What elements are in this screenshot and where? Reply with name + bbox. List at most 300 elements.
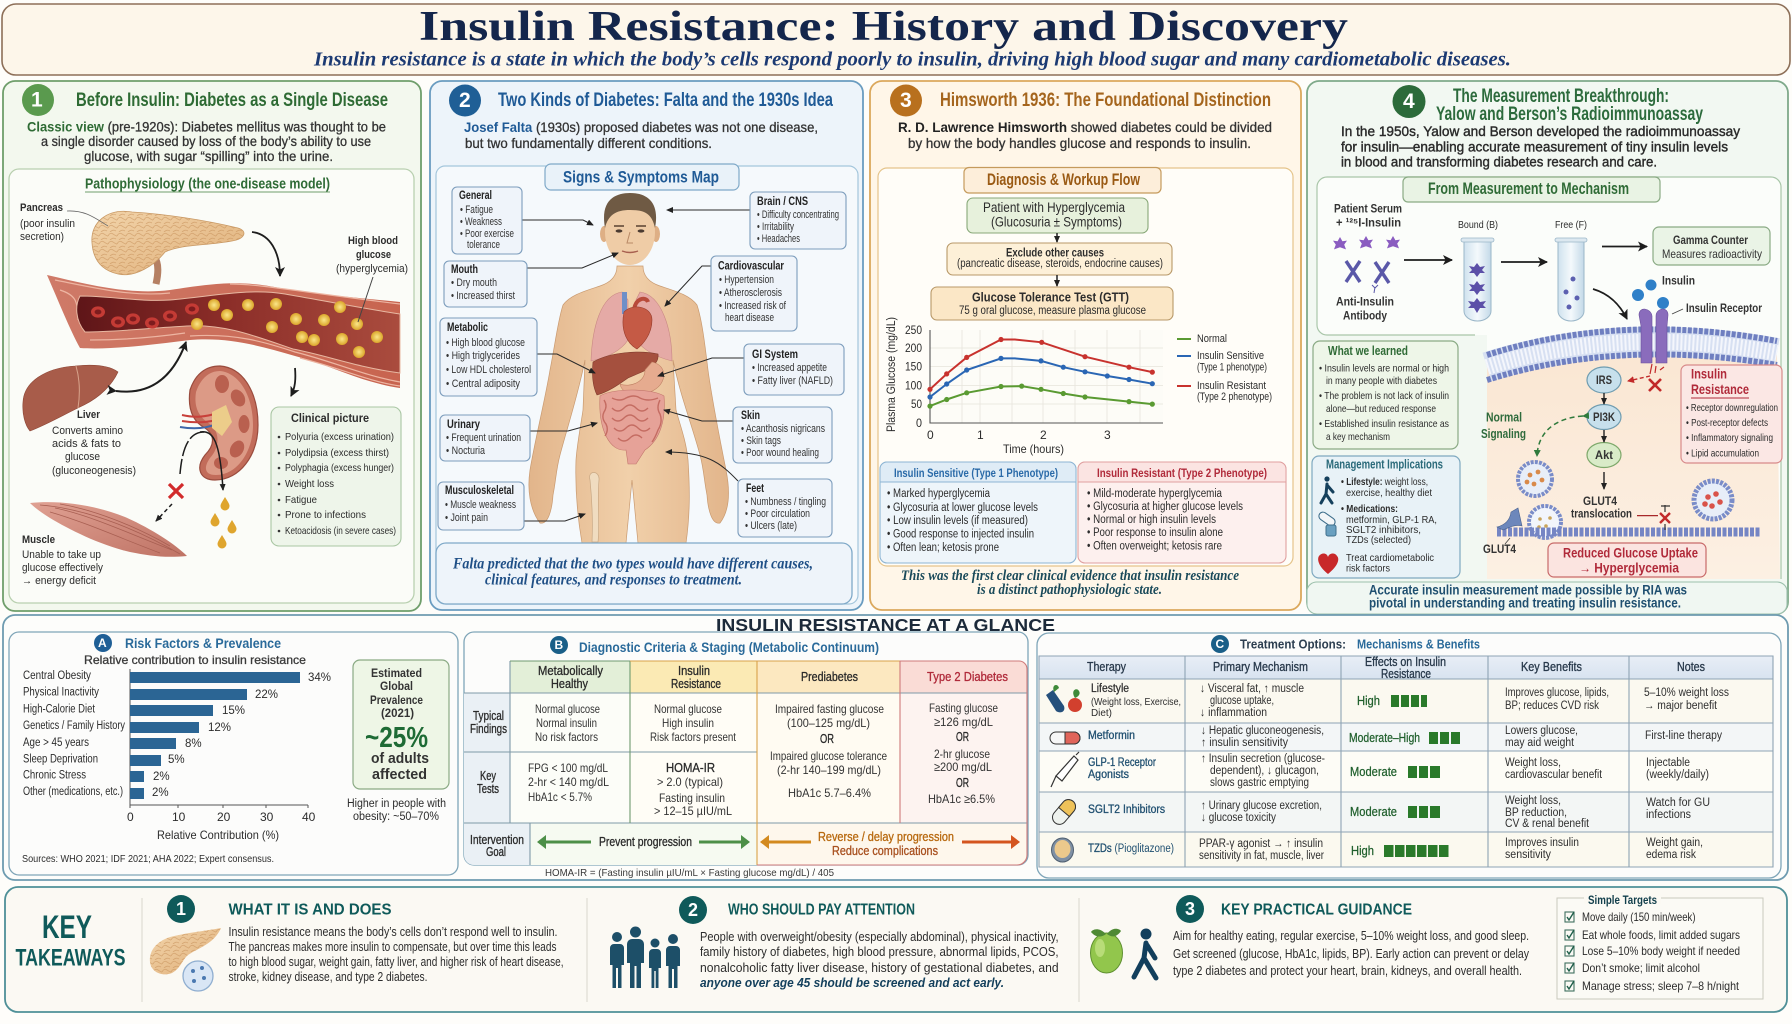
column: insulin resistance: Fasting insulin	[659, 791, 725, 805]
x axis labels	[927, 428, 1111, 456]
takeaway 3 text	[1173, 929, 1530, 978]
orange goal arrow	[760, 830, 1020, 858]
row labels	[470, 709, 524, 859]
chart legend: Insulin Sensitive	[1197, 350, 1264, 362]
insulin sensitive box	[880, 462, 1076, 563]
x axis labels: 2	[1040, 428, 1047, 442]
table fills	[1039, 656, 1773, 867]
flow: gtt box: 75 g oral glucose, measure plasma glucose	[959, 305, 1146, 317]
takeaway 2	[610, 896, 1059, 990]
liver	[23, 365, 118, 431]
cell interior	[1487, 342, 1780, 579]
column: type 2 diabetes: Fasting glucose	[929, 701, 998, 715]
antibody label	[1336, 295, 1394, 323]
heart	[622, 292, 652, 349]
badge b	[550, 636, 568, 654]
takeaway 2 heading: WHO SHOULD PAY ATTENTION	[728, 902, 915, 918]
row labels: Key	[480, 769, 497, 783]
column: type 2 diabetes: ≥200 mg/dL	[934, 760, 992, 774]
ria conclusion band	[1307, 582, 1787, 614]
yalow and berson text	[1341, 123, 1740, 170]
panel 3 heading: Himsworth 1936: The Foundational Distinction	[940, 89, 1271, 111]
box: metabolic: • High blood glucose	[446, 337, 525, 349]
falta text: but two fundamentally different conditions.	[465, 135, 712, 151]
row: lifestyle: ↓ inflammation	[1200, 707, 1267, 719]
green goal arrow: Prevent progression	[599, 835, 692, 849]
y axis labels: 50	[911, 397, 922, 411]
badge 3	[890, 84, 922, 116]
badge takeaway 2	[679, 896, 707, 924]
panel b heading: Diagnostic Criteria & Staging (Metabolic Continuum)	[579, 639, 879, 655]
icon: walking person	[1321, 476, 1333, 503]
insulin resistant box: • Often overweight; ketosis rare	[1087, 540, 1222, 552]
falta prediction callout	[436, 543, 852, 604]
box: cardiovascular: • Increased risk of	[719, 300, 787, 312]
arrow to gamma counter	[1602, 246, 1647, 248]
row: sglt2: ↑ Urinary glucose excretion,	[1201, 800, 1322, 812]
flow arrow 2	[1056, 275, 1058, 286]
management implications box: metformin, GLP-1 RA,	[1346, 514, 1437, 526]
column headers: Metabolically	[538, 664, 604, 678]
pancreas label: (poor insulin	[20, 218, 75, 230]
row: metformin: ↑ insulin sensitivity	[1201, 737, 1288, 749]
icon: pancreas and cell	[150, 928, 221, 991]
ria conclusion band: Accurate insulin measurement made possible by RIA was	[1369, 582, 1687, 598]
arrow to free tube	[1501, 261, 1547, 263]
row: sglt2	[1050, 795, 1710, 830]
box: cardiovascular: • Atherosclerosis	[719, 287, 782, 299]
insulin resistant box: Insulin Resistant (Type 2 Phenotype)	[1097, 466, 1267, 480]
clinical picture box: Polyphagia (excess hunger)	[285, 462, 394, 474]
badge 3: 3	[900, 89, 912, 112]
row: lifestyle: 5–10% weight loss	[1644, 687, 1729, 699]
row: lifestyle: → major benefit	[1644, 700, 1718, 712]
panel 4: measurement breakthrough	[1307, 81, 1788, 614]
bar categories: Physical Inactivity	[23, 687, 99, 699]
row: tzds: Improves insulin	[1505, 837, 1579, 849]
row: metformin	[1050, 725, 1722, 749]
clinical picture box	[271, 407, 401, 546]
antibodies	[1346, 261, 1389, 293]
what we learned box	[1313, 341, 1458, 449]
y axis labels: 200	[905, 341, 922, 355]
bar values: 8%	[185, 738, 202, 750]
insulin receptor label: Insulin Receptor	[1686, 301, 1762, 315]
panel c heading: Mechanisms & Benefits	[1357, 636, 1480, 652]
green goal arrow	[537, 835, 750, 849]
patient serum label: + ¹²⁵I-Insulin	[1336, 216, 1401, 230]
column headers: Type 2 Diabetes	[927, 670, 1008, 684]
icon: walking person	[1134, 928, 1156, 978]
urine drops	[210, 497, 236, 548]
column: metabolically healthy: HbA1c < 5.7%	[528, 790, 592, 804]
column: insulin resistance: > 2.0 (typical)	[657, 775, 723, 789]
insulin receptor	[1639, 309, 1668, 363]
risk factor bar chart	[23, 669, 331, 842]
clinical picture box: Clinical picture	[291, 411, 369, 425]
chart legend: (Type 2 phenotype)	[1197, 391, 1272, 403]
box: musculoskeletal	[438, 482, 524, 530]
bar values: 2%	[152, 787, 169, 799]
management implications box	[1312, 456, 1460, 578]
y axis title: Plasma Glucose (mg/dL)	[886, 317, 898, 432]
main title: Insulin Resistance: History and Discovery	[419, 4, 1348, 50]
simple targets box: Eat whole foods, limit added sugars	[1582, 928, 1740, 942]
bar categories: Genetics / Family History	[23, 720, 125, 732]
table headers	[1087, 655, 1705, 681]
simple targets box: Manage stress; sleep 7–8 h/night	[1582, 979, 1740, 993]
panel 4 heading: The Measurement Breakthrough:	[1453, 85, 1669, 107]
insulin sensitive box: • Glycosuria at lower glucose levels	[887, 502, 1038, 514]
patient serum label: Patient Serum	[1334, 202, 1402, 216]
bar values: 15%	[222, 705, 245, 717]
badge b: B	[554, 638, 564, 652]
test tube: bound: Bound (B)	[1458, 219, 1498, 231]
takeaway 1 text: Insulin resistance means the body’s cells don’t respond well to insulin.	[228, 925, 558, 939]
icon: metformin pill	[1050, 732, 1080, 744]
insulin resistance box: • Lipid accumulation	[1686, 448, 1759, 460]
red blood cells	[91, 303, 199, 329]
column: insulin resistance: Normal glucose	[654, 702, 722, 716]
row: metformin: First-line therapy	[1645, 730, 1722, 742]
prevalence callout: affected	[372, 767, 427, 783]
badge a: A	[98, 636, 107, 650]
management implications box: Treat cardiometabolic	[1346, 552, 1434, 564]
takeaway 1	[150, 895, 564, 991]
glut4 translocation label: translocation	[1571, 506, 1632, 520]
pancreas	[92, 211, 244, 284]
icon: heart	[1318, 553, 1338, 574]
classic view text	[27, 118, 386, 164]
row labels: Typical	[473, 709, 504, 723]
high blood glucose label: (hyperglycemia)	[336, 263, 408, 275]
insulin resistance box: Insulin	[1691, 366, 1727, 382]
box: feet	[738, 479, 832, 537]
prevalence callout: Estimated	[371, 666, 422, 680]
insulin resistance box: • Post-receptor defects	[1686, 417, 1768, 429]
falta prediction callout: clinical features, and responses to treatment.	[485, 572, 742, 588]
row: sglt2: Moderate	[1350, 805, 1397, 819]
glut4 label	[1483, 538, 1516, 556]
section title: INSULIN RESISTANCE AT A GLANCE	[716, 615, 1055, 635]
obesity note	[347, 798, 446, 823]
box: brain: • Irritability	[757, 221, 794, 233]
row: tzds: sensitivity in fat, muscle, liver	[1199, 850, 1324, 862]
row labels: Tests	[477, 782, 499, 796]
arrow: liver to blood	[116, 342, 186, 392]
femur	[590, 472, 599, 542]
box: feet: • Ulcers (late)	[745, 520, 797, 532]
box: skin	[733, 407, 832, 463]
box: musculoskeletal: • Muscle weakness	[445, 499, 516, 511]
box: general: tolerance	[467, 239, 500, 251]
kidney	[180, 366, 258, 480]
insulin sensitive box: • Marked hyperglycemia	[887, 488, 991, 500]
key takeaways bar	[5, 887, 1787, 1012]
signalling pathway	[1587, 367, 1621, 489]
row: sglt2: Weight loss,	[1505, 795, 1561, 807]
mechanism heading pill	[1403, 177, 1660, 202]
row: metformin: may aid weight	[1505, 737, 1575, 749]
box: general: General	[459, 190, 492, 202]
icon: apple	[1090, 929, 1122, 973]
badge takeaway 2: 2	[688, 900, 698, 920]
box: feet: • Poor circulation	[745, 508, 810, 520]
box: skin: • Poor wound healing	[741, 447, 819, 459]
bar categories: Chronic Stress	[23, 770, 86, 782]
test tube: bound	[1458, 219, 1498, 321]
test tube: free: Free (F)	[1555, 219, 1587, 231]
box: feet: Feet	[746, 483, 764, 495]
column headers	[538, 664, 1008, 691]
reduced glucose uptake box	[1548, 543, 1706, 577]
takeaway 2 text: nonalcoholic fatty liver disease, history of gestational diabetes, and	[700, 961, 1059, 975]
row: tzds: PPAR-γ agonist → ↑ insulin	[1199, 838, 1323, 850]
key takeaways heading: KEY	[42, 909, 92, 945]
bar values	[152, 672, 331, 799]
simple targets box: Lose 5–10% body weight if needed	[1582, 944, 1740, 958]
node pi3k: PI3K	[1593, 410, 1615, 424]
normal signaling label: Signaling	[1481, 426, 1526, 441]
arrow: blood to clinical picture	[291, 368, 295, 396]
management implications box: • Medications:	[1341, 503, 1398, 515]
column headers: Resistance	[671, 677, 721, 691]
box: gi system: • Fatty liver (NAFLD)	[752, 375, 833, 387]
panel 3: himsworth 1936	[870, 81, 1301, 610]
row labels: Goal	[486, 845, 506, 859]
green signaling arrow	[1537, 416, 1583, 456]
column: insulin resistance: > 12–15 µIU/mL	[654, 804, 732, 818]
muscle label	[22, 534, 103, 587]
bar values: 12%	[208, 722, 231, 734]
badge c: C	[1216, 637, 1224, 651]
takeaway 1 text	[228, 925, 564, 984]
table headers: Primary Mechanism	[1213, 660, 1308, 674]
classic view text: Classic view (pre-1920s): Diabetes mellitus was thought to be	[27, 118, 386, 134]
row labels: Findings	[470, 722, 507, 736]
yalow and berson text: for insulin—enabling accurate measurement of tiny insulin levels	[1341, 138, 1728, 154]
flow heading pill	[964, 168, 1161, 193]
panel 2: two kinds of diabetes	[430, 81, 863, 610]
box: gi system: GI System	[752, 349, 798, 361]
badge 4	[1392, 85, 1426, 118]
blood vessel	[47, 275, 400, 388]
column headers: Healthy	[551, 677, 589, 691]
takeaway 1 heading: WHAT IT IS AND DOES	[228, 902, 392, 918]
liver label	[52, 409, 136, 477]
box: musculoskeletal: Musculoskeletal	[445, 485, 514, 497]
gamma counter box: Gamma Counter	[1673, 233, 1748, 247]
panel a heading: Risk Factors & Prevalence	[125, 635, 281, 651]
column: insulin resistance: High insulin	[662, 716, 714, 730]
row: glp-1: GLP-1 Receptor	[1088, 757, 1156, 769]
badge a	[94, 634, 112, 652]
simple targets box: Simple Targets	[1588, 893, 1657, 907]
row: sglt2: infections	[1646, 809, 1691, 821]
flow: patient box: Patient with Hyperglycemia	[983, 200, 1125, 215]
table fills	[464, 661, 1027, 865]
box: skin: Skin	[741, 410, 760, 422]
blocked translocation	[1637, 505, 1670, 530]
row: metformin: ↓ Hepatic gluconeogenesis,	[1201, 725, 1324, 737]
axis ticks: 20	[217, 810, 231, 824]
box: metabolic: • High triglycerides	[446, 350, 520, 362]
management implications box: risk factors	[1346, 563, 1390, 575]
pancreas label	[20, 202, 108, 243]
insulin sensitive box: • Often lean; ketosis prone	[887, 542, 999, 554]
normal signaling label	[1481, 410, 1526, 441]
badge takeaway 3	[1176, 895, 1204, 923]
red line: insulin resistant	[927, 337, 1155, 392]
stomach	[620, 362, 664, 394]
box: urinary	[440, 415, 530, 461]
orange goal arrow: Reverse / delay progression	[818, 830, 954, 844]
icon: injector pen	[1051, 752, 1079, 787]
bar values: 22%	[255, 689, 278, 701]
row: sglt2: ↓ glucose toxicity	[1201, 812, 1276, 824]
box: cardiovascular	[711, 256, 797, 331]
row: lifestyle: glucose uptake,	[1210, 695, 1274, 707]
flow: gtt box: Glucose Tolerance Test (GTT)	[972, 290, 1129, 304]
classic view text: glucose, with sugar “spilling” into the urine.	[84, 148, 333, 164]
muscle label: → energy deficit	[22, 575, 96, 587]
green line: normal	[927, 384, 1155, 409]
high blood glucose label: glucose	[356, 249, 391, 261]
box: brain: • Headaches	[757, 233, 800, 245]
row labels: Intervention	[470, 833, 524, 847]
pathophysiology heading: Pathophysiology (the one-disease model)	[85, 176, 330, 192]
simple targets box: Move daily (150 min/week)	[1582, 910, 1696, 924]
high blood glucose label: High blood	[348, 235, 398, 247]
column: type 2 diabetes: OR	[956, 776, 969, 790]
icon: pills	[1317, 511, 1337, 536]
box: mouth: • Dry mouth	[451, 277, 497, 289]
high blood glucose label	[336, 235, 408, 322]
y axis labels: 150	[905, 360, 922, 374]
row: glp-1: slows gastric emptying	[1210, 777, 1309, 789]
box: mouth: Mouth	[451, 264, 478, 276]
table headers: Therapy	[1087, 660, 1127, 674]
panel c heading	[1240, 636, 1480, 652]
prevalence callout: Prevalence	[370, 693, 423, 707]
bar categories: High-Calorie Diet	[23, 703, 96, 715]
column headers: Insulin	[678, 664, 710, 678]
axis ticks: 0	[127, 810, 134, 824]
box: mouth	[444, 261, 527, 307]
axis ticks: 30	[260, 810, 274, 824]
obesity note: obesity: ~50–70%	[353, 811, 439, 823]
himsworth text: by how the body handles glucose and responds to insulin.	[908, 135, 1251, 151]
box: gi system	[744, 344, 844, 395]
y axis labels: 0	[916, 416, 922, 430]
table headers: Key Benefits	[1521, 660, 1582, 674]
column: metabolically healthy: Normal glucose	[535, 702, 600, 716]
badge c	[1211, 635, 1229, 653]
icon: people	[610, 926, 680, 988]
box: metabolic: Metabolic	[447, 322, 488, 334]
row: metformin: Metformin	[1088, 730, 1135, 742]
flow: patient box: (Glucosuria ± Symptoms)	[991, 214, 1122, 230]
column headers: Prediabetes	[801, 670, 858, 684]
liver label: (gluconeogenesis)	[52, 465, 136, 477]
prevalence callout: of adults	[371, 751, 429, 767]
panel c: treatment options	[1037, 633, 1781, 878]
prevalence callout	[353, 660, 449, 789]
flow arrow 1	[1056, 233, 1058, 242]
bar categories	[23, 670, 125, 798]
box: cardiovascular: Cardiovascular	[718, 260, 784, 272]
badge takeaway 1	[167, 895, 195, 923]
x axis labels: 3	[1104, 428, 1111, 442]
panel 1 heading: Before Insulin: Diabetes as a Single Disease	[76, 89, 388, 111]
badge 2: 2	[459, 89, 471, 112]
panel 2 heading: Two Kinds of Diabetes: Falta and the 1930s Idea	[498, 89, 833, 111]
liver label: Liver	[77, 409, 101, 421]
column: type 2 diabetes: 2-hr glucose	[934, 747, 990, 761]
clinical picture box: Weight loss	[285, 478, 334, 490]
column: prediabetes: (2-hr 140–199 mg/dL)	[777, 763, 881, 777]
row: tzds: High	[1351, 844, 1374, 858]
row: sglt2: BP reduction,	[1505, 807, 1567, 819]
icon: capsule	[1050, 797, 1078, 827]
row: lifestyle: Diet)	[1091, 707, 1112, 719]
insulin resistance box	[1681, 365, 1782, 463]
box: metabolic: • Central adiposity	[446, 378, 520, 390]
clinical picture box: Ketoacidosis (in severe cases)	[285, 525, 396, 537]
patient serum label	[1334, 202, 1402, 230]
liver label: Converts amino	[52, 425, 123, 437]
badge takeaway 3: 3	[1185, 899, 1195, 919]
what we learned box: What we learned	[1328, 344, 1408, 358]
column: type 2 diabetes: ≥126 mg/dL	[934, 715, 993, 729]
yalow and berson text: In the 1950s, Yalow and Berson developed the radioimmunoassay	[1341, 123, 1740, 139]
clinical picture box: Polyuria (excess urination)	[285, 431, 394, 443]
signs and symptoms map	[436, 164, 858, 604]
insulin resistance at a glance section	[3, 615, 1788, 880]
row: sglt2: CV & renal benefit	[1505, 818, 1590, 830]
box: cardiovascular: heart disease	[725, 312, 774, 324]
row: tzds	[1052, 837, 1703, 862]
takeaway 3 text: type 2 diabetes and protect your heart, brain, kidneys, and overall health.	[1173, 964, 1522, 978]
column: insulin resistance	[650, 702, 737, 818]
chart legend: Insulin Resistant	[1197, 380, 1266, 392]
row: lifestyle	[1046, 683, 1729, 719]
lower membrane	[1497, 528, 1760, 536]
classic view text: a single disorder caused by loss of the body’s ability to use	[41, 133, 371, 149]
flow: exclude box: Exclude other causes	[1006, 246, 1104, 260]
what we learned box: • Established insulin resistance as	[1319, 418, 1449, 430]
flow: gtt box	[931, 287, 1173, 320]
chart legend: (Type 1 phenotype)	[1197, 362, 1267, 374]
key takeaways heading: TAKEAWAYS	[16, 944, 126, 972]
yalow and berson text: in blood and transforming diabetes research and care.	[1341, 154, 1657, 170]
takeaway 3 text: Aim for healthy eating, regular exercise, 5–10% weight loss, and good sleep.	[1173, 929, 1529, 943]
takeaway 1 text: The pancreas makes more insulin to compensate, but over time this leads	[228, 940, 556, 954]
node akt: Akt	[1595, 448, 1613, 462]
glut4 label: GLUT4	[1483, 542, 1516, 556]
bar values: 5%	[168, 754, 185, 766]
falta prediction callout: Falta predicted that the two types would have different causes,	[452, 556, 813, 572]
column: prediabetes: (100–125 mg/dL)	[787, 716, 870, 730]
box: brain	[750, 192, 846, 249]
column: metabolically healthy: 2-hr < 140 mg/dL	[528, 775, 609, 789]
row: tzds: edema risk	[1646, 849, 1696, 861]
glut4 vesicle top	[1518, 462, 1552, 496]
himsworth conclusion	[901, 568, 1240, 598]
clinical picture box: Polydipsia (excess thirst)	[285, 447, 389, 459]
glut4 translocation label: GLUT4	[1583, 494, 1617, 508]
insulin resistant box: • Mild-moderate hyperglycemia	[1087, 488, 1223, 500]
